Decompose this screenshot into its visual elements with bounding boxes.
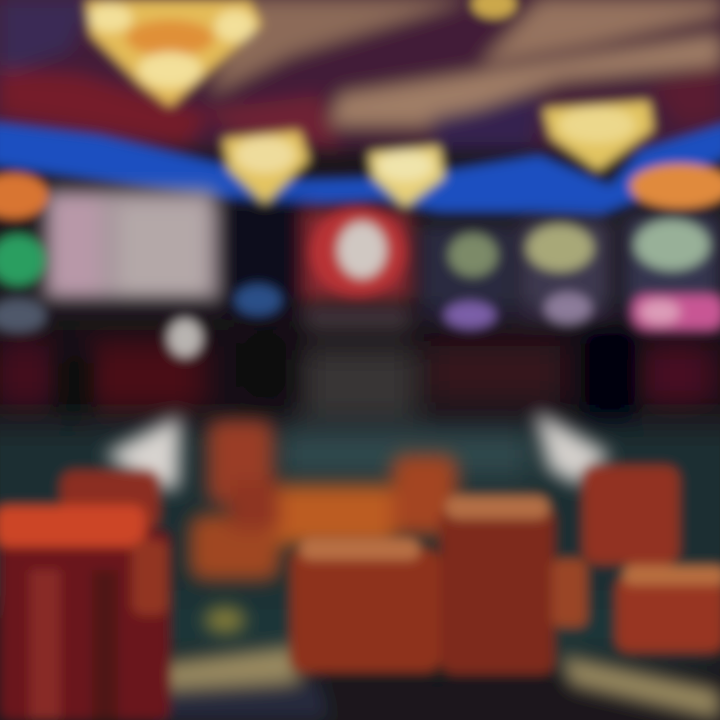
chips centre back <box>190 420 457 580</box>
blue band <box>0 122 720 215</box>
chandelier centre left <box>222 130 310 205</box>
dark lower cabinets <box>0 320 720 425</box>
red wheel <box>310 208 406 296</box>
dark pillars <box>60 330 635 425</box>
blue base <box>234 284 282 316</box>
slot screens <box>0 208 720 358</box>
floor <box>0 425 720 660</box>
green screen <box>0 234 46 286</box>
screen mid left <box>448 233 498 277</box>
violet screens <box>444 301 496 329</box>
chips front centre <box>290 495 588 675</box>
orange lamp right <box>630 164 720 208</box>
slot machine bank <box>0 190 720 348</box>
chandelier centre <box>368 145 445 208</box>
chandelier top <box>472 0 516 18</box>
white light cones <box>105 410 610 490</box>
chandeliers <box>0 0 720 218</box>
floor rug edge <box>140 608 720 720</box>
pink screen right <box>632 294 720 330</box>
chandelier right <box>542 100 654 172</box>
chips right <box>582 465 720 653</box>
chip stacks <box>0 420 720 720</box>
chandelier top left <box>85 0 262 108</box>
ceiling <box>0 0 720 150</box>
screen right <box>634 219 710 271</box>
white glow <box>167 318 203 358</box>
chips left <box>0 470 170 720</box>
screen mid right <box>526 224 594 272</box>
orange lamp left <box>0 174 48 218</box>
